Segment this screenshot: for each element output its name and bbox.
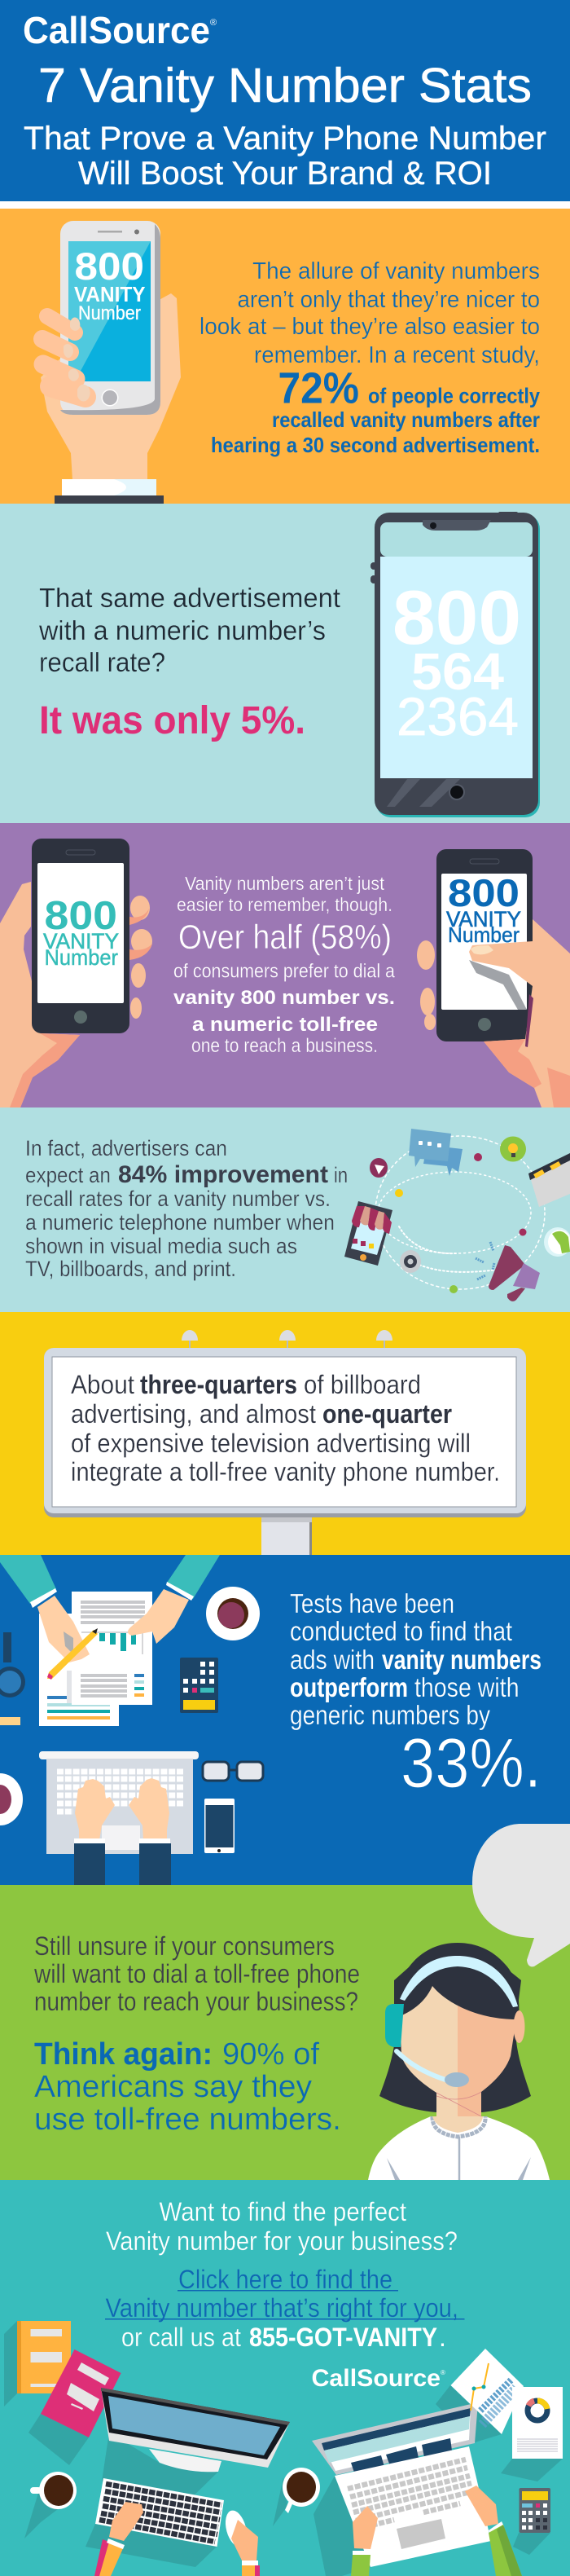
phone screen number: VANITY xyxy=(74,282,145,306)
text: billboard copy: About xyxy=(71,1370,134,1399)
text: vanity numbers easier: Vanity numbers aren’t just xyxy=(185,873,385,894)
stat: over half 58%: Over half (58%) xyxy=(178,918,392,956)
icon: desktop monitor xyxy=(101,2388,290,2472)
link: click here: Click here to find the xyxy=(178,2265,392,2294)
text: allure of vanity numbers: remember. In a recent study, xyxy=(254,342,540,368)
title: 7 Vanity Number Stats xyxy=(38,59,532,112)
text: recall improvement xyxy=(25,1136,348,1281)
text: same advertisement: That same advertisement xyxy=(39,583,340,613)
illustration: marketing icons ring xyxy=(344,1129,570,1301)
icon: orange book xyxy=(17,2321,71,2393)
text: still unsure: number to reach your business? xyxy=(34,1987,358,2016)
text: still unsure: will want to dial a toll-free phone xyxy=(33,1959,360,1988)
icon: left hand with phone xyxy=(0,839,152,1107)
text: vanity numbers easier xyxy=(177,873,392,915)
stat: 72% of people: hearing a 30 second advertisement. xyxy=(211,433,540,457)
text: want to find: Want to find the perfect xyxy=(160,2197,406,2226)
panel: billboard advertising xyxy=(0,1312,570,1557)
text: tests conducted: ads with xyxy=(290,1645,375,1675)
icon: calculator xyxy=(520,2488,550,2533)
text: billboard copy: of expensive television advertising will xyxy=(71,1429,471,1458)
text: billboard copy: of billboard xyxy=(304,1370,421,1399)
link: click here xyxy=(105,2265,464,2323)
panel: over half prefer vanity xyxy=(0,823,570,1107)
phone number text: 2364 xyxy=(397,686,519,746)
phone screen number: 800 xyxy=(448,871,520,914)
text: tests conducted: conducted to find that xyxy=(290,1616,512,1646)
text: same advertisement: recall rate? xyxy=(39,647,165,677)
text: consumers prefer vanity 800 xyxy=(173,960,396,1057)
stat: think again 90%: use toll-free numbers. xyxy=(34,2103,341,2137)
text: consumers prefer vanity 800: of consumers prefer to dial a xyxy=(173,960,396,983)
logo: CallSource: ® xyxy=(210,18,217,28)
logo: CallSource footer: ® xyxy=(441,2369,445,2376)
panel: numeric recall rate xyxy=(0,504,570,823)
phone number text: 800 xyxy=(392,575,521,660)
phone screen number: Number xyxy=(78,302,141,324)
stat: 33%: 33%. xyxy=(401,1724,542,1803)
subtitle: That Prove a Vanity Phone Number xyxy=(24,121,546,156)
text: recall improvement: recall rates for a vanity number vs. xyxy=(25,1187,331,1211)
subtitle: Will Boost Your Brand & ROI xyxy=(78,156,492,192)
text: billboard copy: three-quarters xyxy=(140,1370,297,1399)
illustration: call center agent xyxy=(368,1943,550,2180)
phone screen number: VANITY xyxy=(446,907,521,931)
text: call us: . xyxy=(439,2323,446,2352)
text: tests conducted: generic numbers by xyxy=(290,1700,490,1730)
logo: CallSource: CallSource xyxy=(23,9,210,51)
text: tests conducted xyxy=(290,1588,542,1730)
text: allure of vanity numbers xyxy=(200,258,540,368)
text: recall improvement: TV, billboards, and print. xyxy=(25,1257,236,1281)
subtitle xyxy=(24,121,546,192)
text: billboard copy xyxy=(71,1370,500,1486)
text: call us xyxy=(121,2323,446,2352)
phone screen number: VANITY xyxy=(43,929,119,953)
icon: right hand with phone xyxy=(417,849,570,1107)
text: recall improvement: in xyxy=(334,1163,348,1187)
icon: coffee cups xyxy=(30,2468,320,2513)
text: consumers prefer vanity 800: a numeric toll-free xyxy=(192,1014,378,1036)
text: tests conducted: Tests have been xyxy=(290,1588,454,1618)
panel: 84% improvement xyxy=(0,1107,570,1312)
phone screen number: 800 xyxy=(44,894,117,938)
phone screen number: Number xyxy=(448,923,520,947)
stat: think again 90%: Americans say they xyxy=(34,2070,312,2104)
icon: chart papers xyxy=(451,2349,563,2459)
icon: pink notebook xyxy=(41,2349,121,2437)
text: billboard copy: advertising, and almost xyxy=(71,1399,316,1429)
text: want to find: Vanity number for your business? xyxy=(106,2226,458,2256)
stat: think again 90% xyxy=(34,2037,341,2137)
phone number text: 564 xyxy=(411,642,504,701)
text: still unsure: Still unsure if your consumers xyxy=(34,1931,335,1961)
text: same advertisement: with a numeric number’s xyxy=(38,615,326,645)
text: consumers prefer vanity 800: one to reach a business. xyxy=(191,1035,378,1057)
text: billboard copy: one-quarter xyxy=(322,1399,452,1429)
text: call us: 855-GOT-VANITY xyxy=(249,2323,437,2352)
text: recall improvement: expect an xyxy=(25,1163,111,1187)
stat: 72% of people: recalled vanity numbers after xyxy=(272,407,540,432)
stat: 72% of people: of people correctly xyxy=(368,383,540,407)
text: vanity numbers easier: easier to remember, though. xyxy=(177,894,392,915)
text: call us: or call us at xyxy=(121,2323,241,2352)
stat: 72% of people xyxy=(211,363,540,457)
text: tests conducted: those with xyxy=(414,1672,520,1702)
text: consumers prefer vanity 800: vanity 800 number vs. xyxy=(173,987,395,1009)
icon: billboard xyxy=(44,1330,526,1557)
text: allure of vanity numbers: aren’t only that they’re nicer to xyxy=(238,287,540,313)
phone screen number: Number xyxy=(44,945,118,970)
link: click here: Vanity number that’s right for you, xyxy=(106,2293,458,2323)
panel: header xyxy=(0,0,570,201)
phone screen number xyxy=(446,871,521,947)
text: tests conducted: outperform xyxy=(290,1672,408,1702)
text: recall improvement: shown in visual media such as xyxy=(25,1234,297,1258)
stat: 72% of people: 72% xyxy=(278,363,359,412)
phone screen number xyxy=(43,894,119,970)
stat: it was only 5%: It was only 5%. xyxy=(39,699,305,742)
phone screen number: 800 xyxy=(75,244,144,288)
text: recall improvement: 84% improvement xyxy=(118,1161,328,1188)
phone screen number xyxy=(74,244,145,324)
icon: keyboard xyxy=(94,2478,260,2576)
panel: 72% recall stat xyxy=(0,209,570,504)
text: recall improvement: a numeric telephone number when xyxy=(25,1210,335,1235)
text: same advertisement xyxy=(38,583,340,677)
text: still unsure xyxy=(33,1931,360,2016)
panel: outperform stat xyxy=(0,1555,570,1885)
illustration: desk with papers and laptop xyxy=(0,1555,263,1885)
logo: CallSource footer: CallSource xyxy=(311,2365,441,2392)
icon: laptop xyxy=(312,2402,522,2576)
text: billboard copy: integrate a toll-free vanity phone number. xyxy=(71,1457,500,1486)
icon: smartphone with numeric number xyxy=(370,512,540,817)
text: recall improvement: In fact, advertisers can xyxy=(25,1136,227,1160)
stat: think again 90%: Think again: xyxy=(34,2037,213,2072)
stat: think again 90%: 90% of xyxy=(222,2037,319,2072)
text: allure of vanity numbers: The allure of vanity numbers xyxy=(252,258,540,284)
icon: speech bubble xyxy=(472,1824,570,1966)
illustration: desk with computers xyxy=(4,2321,563,2576)
text: want to find xyxy=(106,2197,458,2256)
panel: toll-free usage xyxy=(0,1885,570,2180)
phone number text xyxy=(392,575,521,746)
icon: hand holding phone xyxy=(41,221,181,504)
panel: call to action xyxy=(0,2180,570,2576)
text: allure of vanity numbers: look at – but they’re also easier to xyxy=(200,314,540,340)
